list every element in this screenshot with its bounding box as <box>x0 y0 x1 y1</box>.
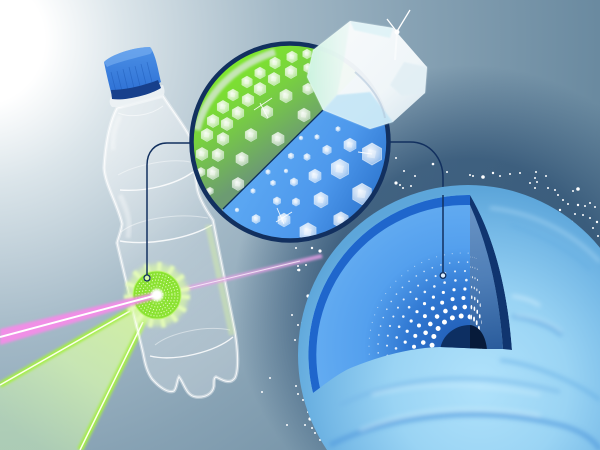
bottle collar <box>110 85 164 107</box>
exit beam <box>180 256 322 290</box>
dark glow behind planet <box>233 65 600 450</box>
spot dots <box>136 274 178 316</box>
bottle cap <box>104 47 161 99</box>
spot spikes <box>129 267 185 323</box>
crust band <box>308 195 470 393</box>
laser flare <box>151 289 163 301</box>
diamond facet lines <box>355 72 385 118</box>
diamond right facets <box>390 62 427 96</box>
leader end ring <box>144 275 150 281</box>
bottle body <box>104 96 238 397</box>
cut-away wall <box>470 205 503 349</box>
stars around planet <box>261 157 599 441</box>
lower-right leader segment <box>442 195 444 272</box>
diamond rain dots, wall <box>470 256 482 349</box>
spot soft halo <box>126 264 188 326</box>
planet sphere <box>298 185 600 450</box>
lens rim sheen <box>197 52 275 130</box>
magnified lens <box>189 41 391 243</box>
lens ring <box>192 44 388 240</box>
beam glow <box>0 292 157 345</box>
beam edge core <box>0 311 143 450</box>
planet <box>295 185 600 450</box>
lens blue half <box>223 110 386 238</box>
lens green half <box>194 46 386 238</box>
leader end ring <box>440 273 446 278</box>
diamond body <box>307 21 427 129</box>
diamond left facet <box>307 21 350 110</box>
planet surface bands <box>330 208 600 450</box>
diamond lower facet <box>323 92 393 129</box>
leader line lens to planet <box>388 142 443 195</box>
green laser beams <box>0 295 157 450</box>
bottle glow outline <box>104 96 238 397</box>
pink laser entry beam <box>0 289 163 345</box>
bottle highlights <box>113 106 233 358</box>
large diamond <box>307 10 427 129</box>
green reaction spot <box>126 264 188 326</box>
diamond sparkle <box>387 10 410 60</box>
pink laser through bottle <box>180 256 322 290</box>
crust wall band <box>470 195 512 350</box>
planet core <box>440 325 487 350</box>
small crystal sparkles <box>254 98 372 224</box>
beam core <box>0 295 157 337</box>
crystals in green half <box>196 49 313 195</box>
spot disc <box>133 271 181 319</box>
lens divider <box>223 110 323 209</box>
cut-away interior <box>308 195 512 393</box>
beam fan fill <box>0 295 157 450</box>
crystals in blue half <box>235 126 382 241</box>
water bottle <box>104 47 238 397</box>
leader line bottle to lens <box>144 143 192 281</box>
diamond rain dots, front face <box>368 252 470 356</box>
beam edge glow <box>0 299 153 450</box>
